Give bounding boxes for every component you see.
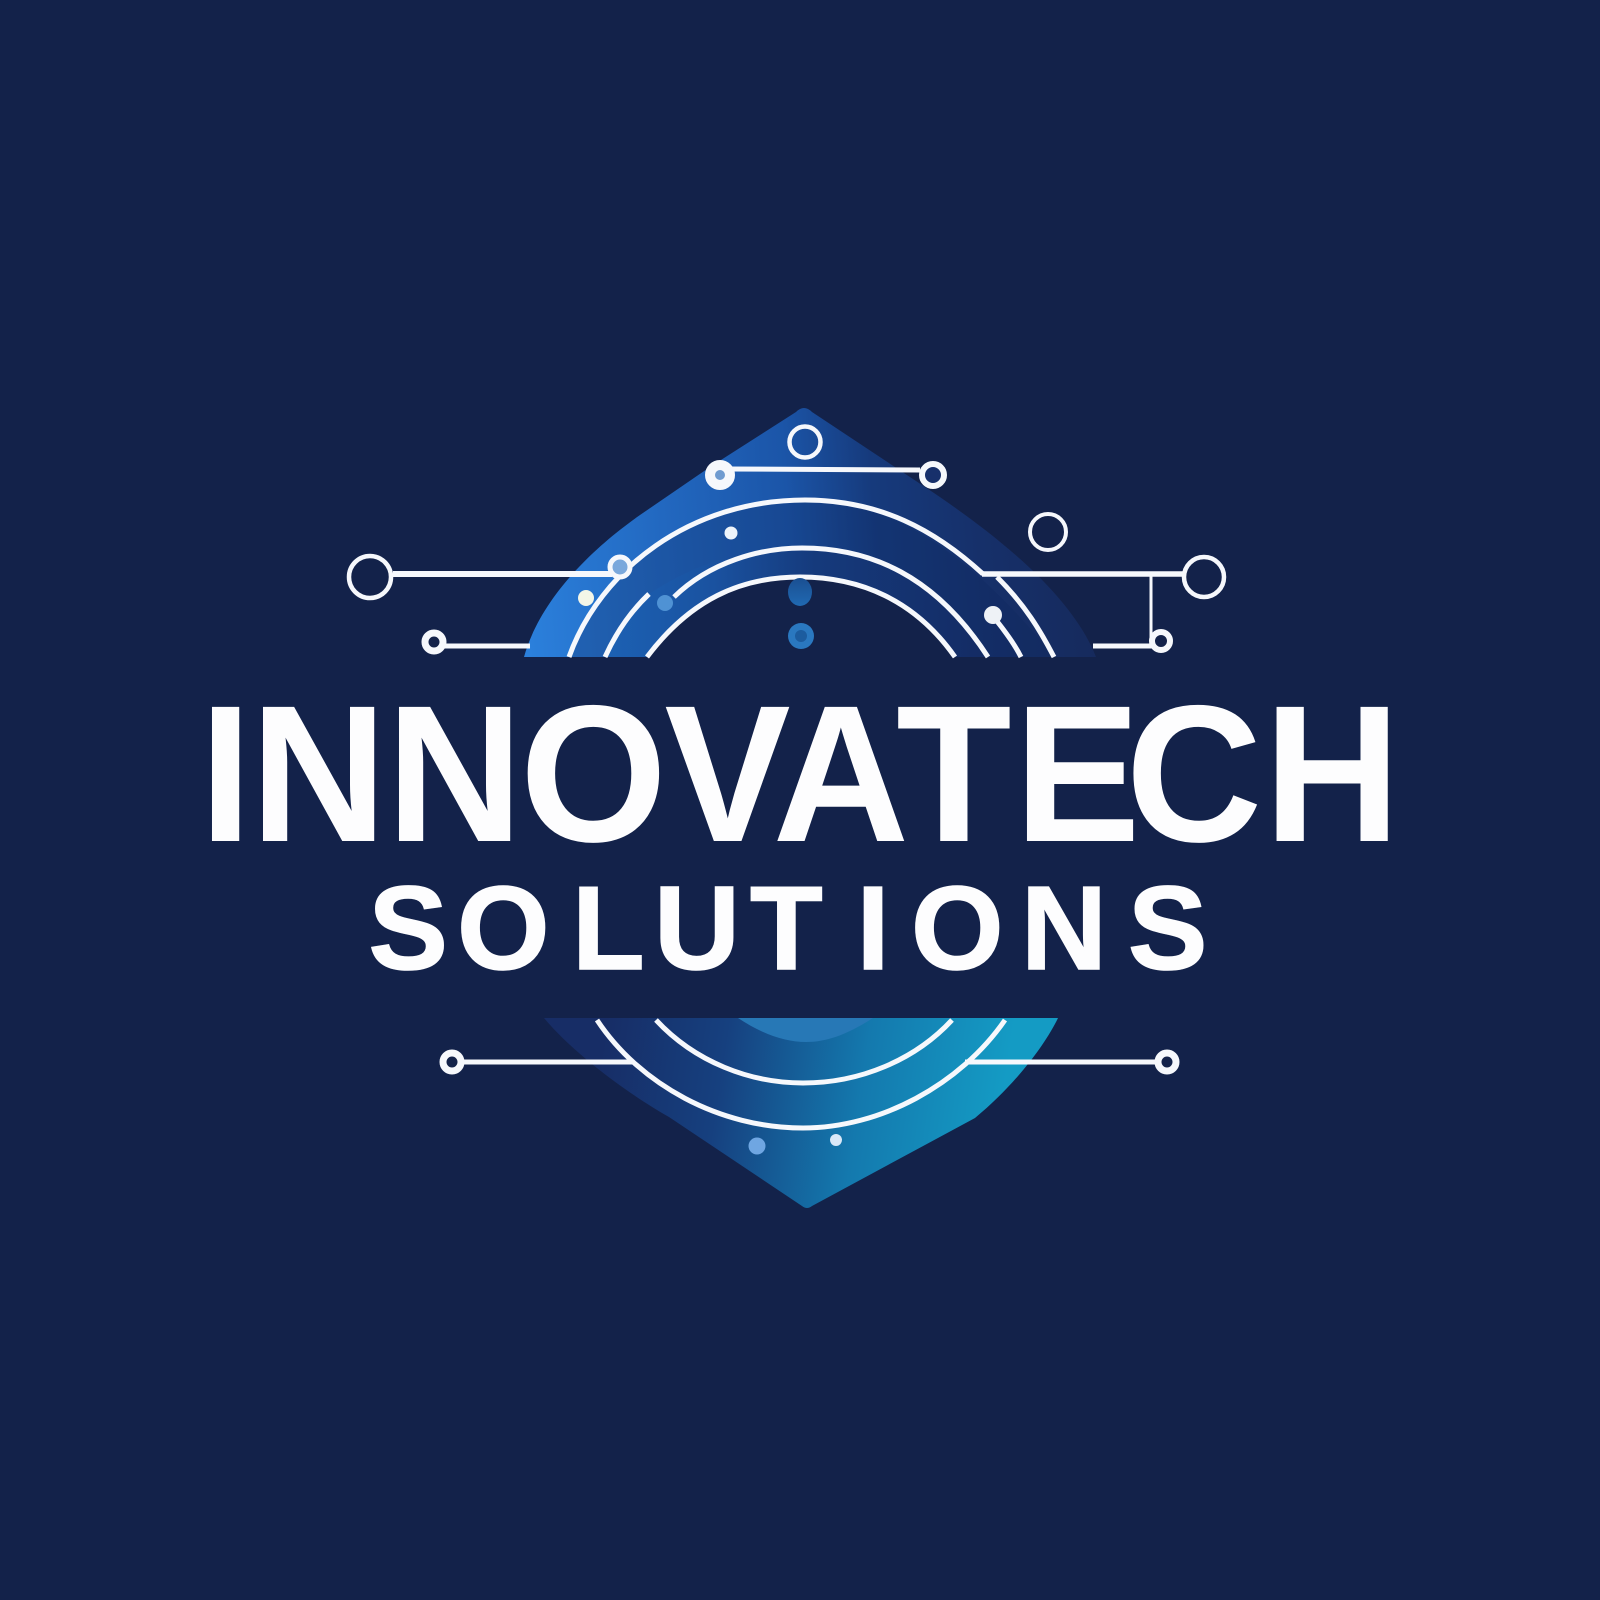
title: INNOVATECH: INNOVATECH xyxy=(199,664,1401,883)
apex ring xyxy=(790,426,820,458)
bottom circuit arcs xyxy=(597,1020,1005,1128)
top emblem xyxy=(349,408,1224,657)
right connector xyxy=(982,571,1184,577)
inner dark core xyxy=(647,577,955,657)
subtitle: SOLUTIONS: SOLUTIONS xyxy=(368,862,1207,995)
lower right connector xyxy=(1093,644,1152,648)
darker inner band xyxy=(605,548,988,657)
lower left connector xyxy=(444,644,530,648)
top connector xyxy=(728,469,920,470)
band under outer arc xyxy=(569,500,1054,657)
left connector xyxy=(393,571,612,577)
upper right ring xyxy=(1030,514,1066,550)
bottom connectors xyxy=(443,1053,1176,1071)
circuit lines and nodes xyxy=(349,426,1224,651)
bottom emblem xyxy=(443,1018,1176,1208)
top emblem blue shield shape xyxy=(524,408,1096,657)
bottom dots xyxy=(748,1134,842,1154)
bottom emblem shield shape xyxy=(544,1018,1058,1208)
dots xyxy=(578,526,1002,649)
circuit arcs xyxy=(569,500,1054,657)
